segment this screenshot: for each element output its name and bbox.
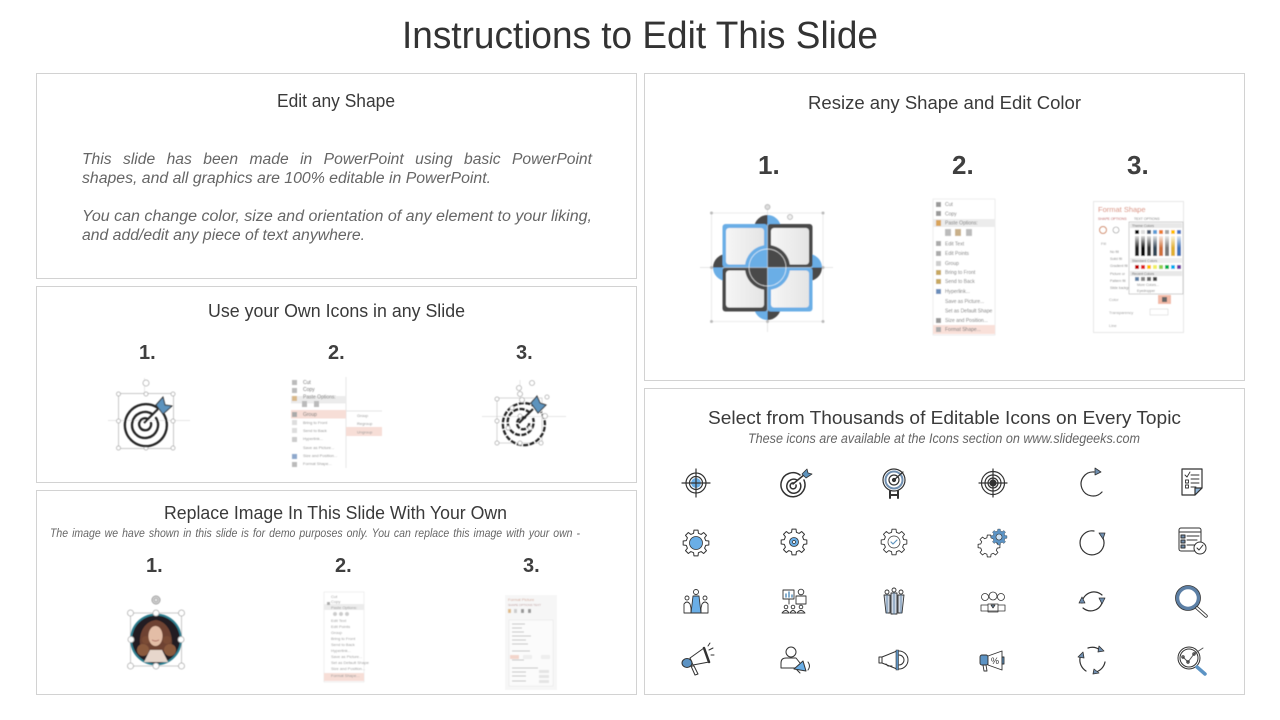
- text block: icons source note: These icons are available at the Icons section on www.slidegeeks.com: [748, 431, 1140, 446]
- context menu: format shape: Group: [331, 630, 343, 635]
- context menu: format shape: Send to Back: [331, 642, 355, 647]
- pane: format shape colour picker: Picture or: [1110, 272, 1126, 276]
- context menu: format shape: [324, 592, 370, 682]
- context menu: edit shape: Save as Picture...: [945, 299, 984, 305]
- icon: selected target: [108, 378, 190, 450]
- pane: format shape colour picker: Format Shape: [1098, 205, 1146, 214]
- pane: format shape colour picker: More Colors...: [1137, 283, 1159, 287]
- pane: format shape colour picker: SHAPE OPTIONS: [1098, 217, 1127, 221]
- step numbers: 1.: [758, 150, 780, 180]
- context menu: format shape: Size and Position...: [331, 666, 365, 671]
- step numbers: 2.: [328, 342, 345, 364]
- context menu: format shape: Edit Text: [331, 618, 347, 623]
- text block: instructions: shapes, and all graphics are 100% editable in PowerPoint.: [82, 170, 491, 187]
- heading: editable icons: Select from Thousands of Editable Icons on Every Topic: [708, 407, 1181, 428]
- step numbers: [139, 342, 533, 364]
- context menu: edit shape: Paste Options:: [945, 220, 978, 226]
- context menu: format shape: Copy: [331, 599, 340, 604]
- context menu: edit shape: Format Shape...: [945, 327, 981, 333]
- context menu: ungroup: Group: [357, 413, 369, 418]
- context menu: ungroup: Ungroup: [357, 430, 373, 434]
- pane: format shape colour picker: TEXT OPTIONS: [1134, 217, 1160, 221]
- context menu: edit shape: Copy: [945, 212, 957, 218]
- context menu: format shape: Paste Options:: [331, 605, 357, 610]
- icon: crosshair target: [682, 469, 710, 497]
- heading: replace image: Replace Image In This Slide With Your Own: [164, 502, 507, 523]
- icon: megaphone: [682, 643, 714, 675]
- icon: three arrows cycle: [1078, 646, 1105, 674]
- text block: instructions: [82, 151, 593, 244]
- step numbers: 3.: [516, 342, 533, 364]
- pane: format shape colour picker: Color: [1109, 297, 1119, 302]
- context menu: ungroup: Paste Options:: [303, 394, 336, 400]
- step numbers: 2.: [952, 150, 974, 180]
- pane: format shape colour picker: Eyedropper: [1137, 289, 1156, 293]
- context menu: ungroup: Send to Back: [303, 428, 327, 433]
- icon: browser checklist: [1179, 528, 1206, 554]
- icon: dart target: [781, 469, 812, 497]
- diagram: four-square shape with selection: [700, 204, 833, 332]
- heading: edit any shape: Edit any Shape: [277, 90, 395, 111]
- icon: three professionals: [981, 592, 1005, 612]
- pane: format shape colour picker: Theme Colors: [1132, 224, 1154, 228]
- context menu: format shape: Cut: [331, 594, 338, 599]
- context menu: ungroup: Copy: [303, 387, 315, 393]
- panel: edit any shape: [36, 74, 636, 278]
- context menu: edit shape: Size and Position...: [945, 318, 988, 324]
- context menu: ungroup: Size and Position...: [303, 453, 337, 458]
- context menu: format shape: Set as Default Shape: [331, 660, 370, 665]
- icon: person with megaphone: [781, 647, 810, 673]
- icon: gear with ring centre: [781, 529, 807, 555]
- icon: gear with check: [881, 529, 907, 555]
- step numbers: 3.: [1127, 150, 1149, 180]
- context menu: format shape: Bring to Front: [331, 636, 356, 641]
- context menu: ungroup: Format Shape...: [303, 461, 332, 466]
- step numbers: [758, 150, 1149, 180]
- icon: percent megaphone: %: [991, 656, 999, 666]
- pane: format shape colour picker: Gradient fill: [1110, 264, 1128, 268]
- text block: replace image note: The image we have shown in this slide is for demo purposes only. You can replace this image with your own -: [50, 528, 580, 540]
- step numbers: 1.: [146, 555, 163, 577]
- icon: percent megaphone: [980, 651, 1004, 671]
- pane: format shape colour picker: Transparency: [1109, 310, 1133, 315]
- image: portrait in circle with selection handles: [128, 596, 184, 669]
- icon: magnifier: [1176, 586, 1206, 616]
- step numbers: 2.: [335, 555, 352, 577]
- context menu: edit shape: Cut: [945, 202, 953, 208]
- panel: replace image: [36, 490, 636, 694]
- heading: use your own icons: Use your Own Icons in any Slide: [208, 300, 465, 321]
- pane: format picture: SHAPE OPTIONS TEXT: [508, 603, 541, 607]
- context menu: edit shape: Send to Back: [945, 279, 975, 285]
- icon: circular arrow: [1080, 531, 1105, 555]
- icon: two arrows cycle: [1079, 592, 1105, 611]
- text block: instructions: and add/edit any piece of text anywhere.: [82, 227, 365, 244]
- pane: format shape colour picker: Solid fill: [1110, 257, 1122, 261]
- icon: ungrouped target: [482, 380, 566, 445]
- step numbers: [146, 555, 540, 577]
- pane: format shape colour picker: Standard Colors: [1132, 259, 1158, 263]
- pane: format picture: [505, 595, 557, 690]
- pane: format shape colour picker: Pattern fill: [1110, 279, 1126, 283]
- icon: presentation with audience: [782, 589, 806, 613]
- step numbers: 3.: [523, 555, 540, 577]
- pane: format shape colour picker: Fill: [1101, 241, 1106, 246]
- context menu: ungroup: Hyperlink...: [303, 436, 323, 441]
- panel: use your own icons: [36, 286, 636, 482]
- context menu: ungroup: Save as Picture...: [303, 445, 334, 450]
- heading: resize any shape: Resize any Shape and Edit Color: [808, 92, 1081, 113]
- context menu: edit shape: Bring to Front: [945, 270, 976, 276]
- step numbers: 1.: [139, 342, 156, 364]
- context menu: edit shape: Set as Default Shape: [945, 308, 992, 314]
- context menu: format shape: Format Shape...: [331, 673, 360, 678]
- context menu: format shape: Edit Points: [331, 624, 350, 629]
- context menu: format shape: Save as Picture...: [331, 654, 362, 659]
- icon: meeting group: [684, 590, 708, 613]
- text block: instructions: This slide has been made in PowerPoint using basic PowerPoint: [82, 151, 593, 168]
- context menu: edit shape: Group: [945, 261, 959, 267]
- icon: magnifier with trend line: [1178, 647, 1205, 674]
- pane: format shape colour picker: [1094, 202, 1184, 332]
- context menu: format shape: Hyperlink...: [331, 648, 351, 653]
- icon: horn megaphone: [879, 650, 908, 670]
- context menu: ungroup: [291, 377, 382, 468]
- context menu: ungroup: Group: [303, 412, 317, 418]
- context menu: edit shape: Hyperlink...: [945, 289, 970, 295]
- icon: archery target on stand: [883, 469, 905, 498]
- panel: resize any shape: [644, 74, 1244, 380]
- pane: format shape colour picker: No fill: [1110, 250, 1119, 254]
- icon: gear with blue centre: [683, 530, 709, 556]
- context menu: edit shape: Edit Text: [945, 242, 965, 248]
- title: Instructions to Edit This Slide: [402, 15, 878, 57]
- icon: two gears: [978, 529, 1007, 557]
- panel: editable icons: [644, 388, 1244, 694]
- icon: single arrow arc: [1081, 468, 1102, 496]
- context menu: edit shape: [933, 199, 995, 335]
- icon: checklist document: [1182, 469, 1202, 495]
- context menu: ungroup: Cut: [303, 380, 311, 386]
- pane: format shape colour picker: Line: [1109, 323, 1117, 328]
- context menu: ungroup: Bring to Front: [303, 420, 328, 425]
- pane: format shape colour picker: Slide background: [1110, 286, 1137, 290]
- icon: dark crosshair target: [979, 469, 1007, 497]
- context menu: edit shape: Edit Points: [945, 251, 969, 257]
- icon: business team: [884, 588, 904, 614]
- pane: format picture: Format Picture: [508, 597, 535, 602]
- text block: instructions: You can change color, size and orientation of any element to your liking,: [82, 208, 592, 225]
- pane: format shape colour picker: Recent Colors: [1132, 272, 1154, 276]
- context menu: ungroup: Regroup: [357, 421, 373, 426]
